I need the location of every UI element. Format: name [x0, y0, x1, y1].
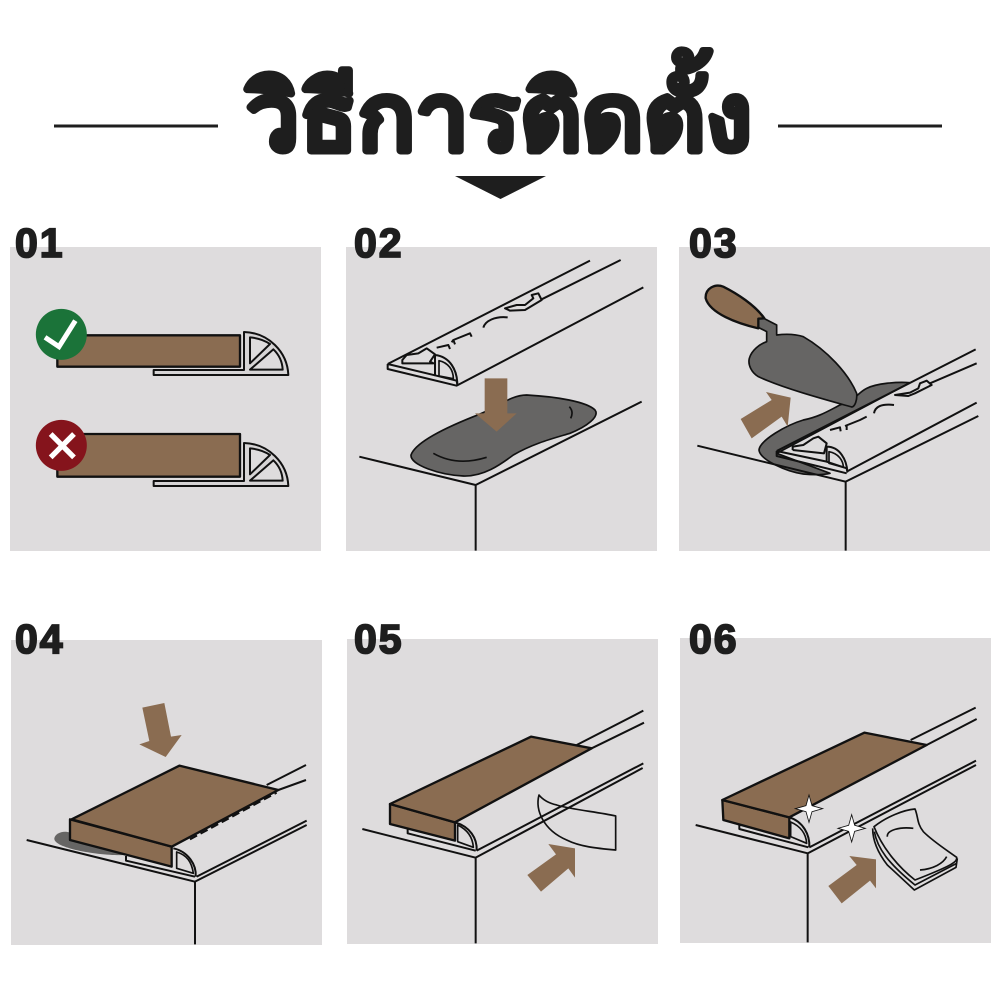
panel background 04 — [11, 640, 322, 945]
tape strip — [538, 795, 616, 850]
diagram: tile pressed on trim — [27, 703, 307, 944]
downward triangle under title — [455, 176, 546, 199]
trim profile — [777, 349, 977, 473]
table edge — [697, 416, 978, 551]
panel: step 04 press tile on — [11, 616, 322, 945]
table edge — [696, 765, 976, 942]
mortar — [54, 832, 124, 855]
diagram: tile with peeled tape — [362, 711, 644, 943]
sparkle on corner — [795, 795, 823, 822]
diagram: trim above mortar — [359, 260, 643, 551]
step number 02: 02 — [354, 220, 404, 266]
step number 06: 06 — [689, 616, 739, 662]
step number 04: 04 — [15, 616, 65, 662]
mortar blob — [411, 395, 596, 476]
arrow: toward corner — [828, 856, 876, 903]
tile — [390, 737, 592, 841]
panel background 03 — [679, 247, 990, 551]
panel background 06 — [680, 638, 991, 943]
tile — [70, 766, 278, 867]
step number 03: 03 — [689, 220, 739, 266]
trim profile — [388, 260, 643, 386]
arrow: toward tape — [527, 844, 575, 892]
panel: step 05 wipe with tape — [347, 616, 658, 944]
arrow: press down — [139, 703, 182, 757]
panel: step 01 correct and incorrect gap — [10, 220, 321, 551]
panel: step 02 place trim on adhesive — [346, 220, 657, 551]
diagram: trowel over trim — [697, 286, 978, 551]
table edge — [359, 402, 642, 551]
table edge — [362, 768, 643, 943]
panel: step 06 clean with sponge — [680, 616, 991, 943]
panel background 01 — [10, 247, 321, 551]
mortar — [759, 382, 910, 475]
panel background 05 — [347, 639, 658, 944]
sparkle on edge — [838, 815, 865, 842]
arrow: down — [475, 378, 517, 432]
icon: trowel — [706, 286, 857, 407]
step number 01: 01 — [15, 220, 65, 266]
icon: green check badge — [36, 309, 87, 360]
table edge — [27, 821, 307, 944]
diagram: correct spacing — [36, 309, 288, 375]
tile — [722, 733, 927, 838]
panel: step 03 trowel spreading mortar — [679, 220, 990, 551]
title rule left — [54, 124, 218, 128]
diagram: clean tile and sponge — [696, 708, 977, 942]
icon: red cross badge — [36, 420, 87, 471]
diagram: incorrect spacing — [36, 420, 288, 486]
title rule right — [778, 124, 942, 128]
icon: sponge — [873, 809, 957, 890]
title: installation method heading: วิธีการติดตั้ง — [245, 48, 752, 170]
step number 05: 05 — [354, 616, 404, 662]
panel background 02 — [346, 247, 657, 551]
arrow: toward trim — [741, 392, 791, 438]
